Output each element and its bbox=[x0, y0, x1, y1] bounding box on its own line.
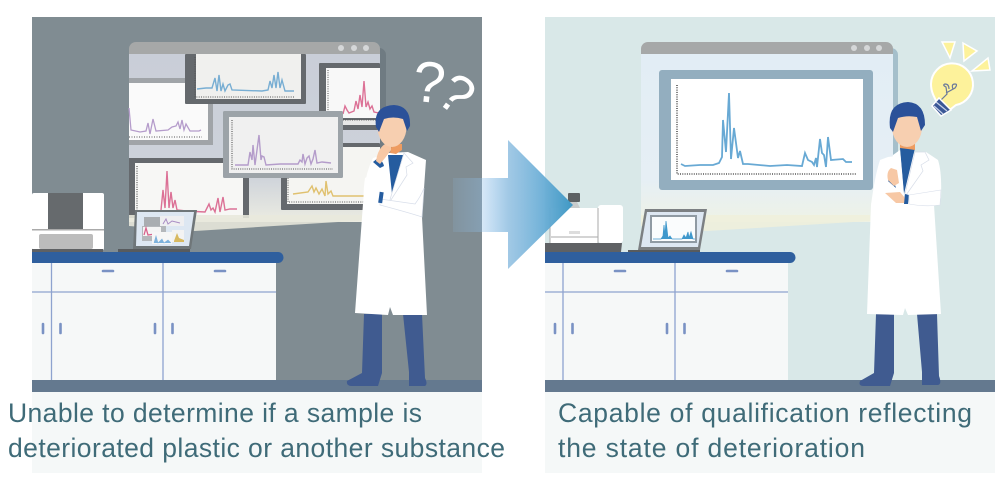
caption: problem: Unable to determine if a sample is bbox=[8, 398, 422, 428]
scientist with idea bbox=[860, 102, 941, 386]
caption: problem: deteriorated plastic or another substance bbox=[8, 433, 505, 463]
bench and cabinets right bbox=[545, 252, 796, 380]
caption: solution: Capable of qualification reflecting bbox=[558, 398, 972, 428]
spectrum window: centre purple bbox=[223, 111, 343, 178]
spectrum window: top right red bbox=[319, 63, 380, 130]
floor left bbox=[32, 380, 482, 392]
laptop with spectrum bbox=[628, 209, 707, 253]
laptop with mini windows bbox=[118, 210, 197, 252]
icon: light bulb bbox=[931, 42, 990, 116]
large monitor with many spectra bbox=[129, 42, 386, 222]
scientist thinking bbox=[347, 105, 427, 386]
arrow bbox=[453, 140, 573, 269]
question marks bbox=[410, 49, 486, 128]
question marks: ? bbox=[410, 49, 449, 117]
lab instrument right bbox=[545, 193, 623, 252]
projector light left bbox=[129, 215, 370, 231]
caption: solution bbox=[545, 392, 995, 473]
panel: solution scene bbox=[545, 17, 995, 392]
floor right bbox=[545, 380, 995, 392]
spectrum window: lower left red bbox=[129, 158, 249, 218]
spectrum window: left purple bbox=[129, 78, 213, 145]
caption: problem bbox=[8, 392, 505, 473]
spectrum chart bbox=[677, 85, 856, 174]
spectrum window: top blue bbox=[185, 54, 306, 104]
spectrum window: lower right yellow bbox=[281, 143, 380, 210]
caption: solution: the state of deterioration bbox=[558, 433, 865, 463]
bench and cabinets left bbox=[32, 252, 284, 380]
lab instrument left bbox=[32, 193, 104, 252]
question marks: ? bbox=[426, 61, 486, 128]
panel: problem scene bbox=[32, 17, 486, 392]
large monitor with single spectrum bbox=[641, 42, 898, 222]
projector light right bbox=[641, 215, 870, 231]
